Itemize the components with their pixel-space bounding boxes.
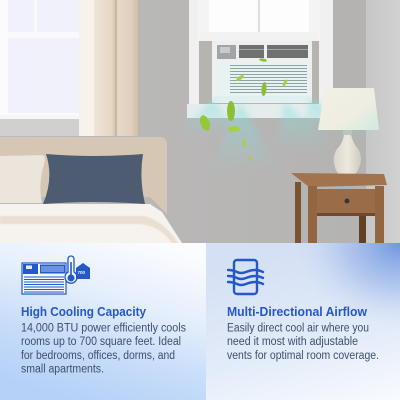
front grille [218,63,308,95]
green leaves [198,58,288,160]
bedside table [291,173,387,243]
bed headboard [0,137,167,214]
heading: multi-directional airflow: Multi-Directional Airflow [227,304,368,319]
control panel [217,45,236,59]
icon: airflow vent [228,260,263,294]
icon: air conditioner with thermometer and house: 700 [78,270,86,275]
icon: air conditioner with thermometer and house [22,256,90,294]
panel: high cooling capacity [0,243,206,400]
heading: high cooling capacity: High Cooling Capacity [21,304,147,319]
text block: cooling description: small apartments. [21,364,104,376]
blue cushion [43,154,145,204]
text block: airflow description: Easily direct cool air where you [227,322,369,334]
text block: airflow description: need it most with adjustable [227,336,358,348]
text block: cooling description: for bedrooms, offices, dorms, and [21,350,175,362]
right window with frame [187,0,333,118]
white pillow [0,155,45,203]
corner wall [366,0,400,243]
left window [0,0,84,136]
panel: multi-directional airflow [206,243,400,400]
text block: cooling description: 14,000 BTU power efficiently cools [21,322,186,334]
top vents [239,45,264,58]
photo: bedroom scene [0,0,400,243]
air conditioner unit [212,41,312,103]
text block: cooling description: rooms up to 700 square feet. Ideal [21,336,181,348]
text block: airflow description: vents for optimal room coverage. [227,350,379,362]
window sill [187,104,321,118]
bed sheets [0,204,182,243]
wall [0,0,400,243]
curtain [79,0,138,136]
text block: cooling description [21,322,186,376]
table lamp [318,88,379,178]
text block: airflow description [227,322,379,362]
drawer knob [344,198,350,204]
cool air rays [175,98,385,170]
